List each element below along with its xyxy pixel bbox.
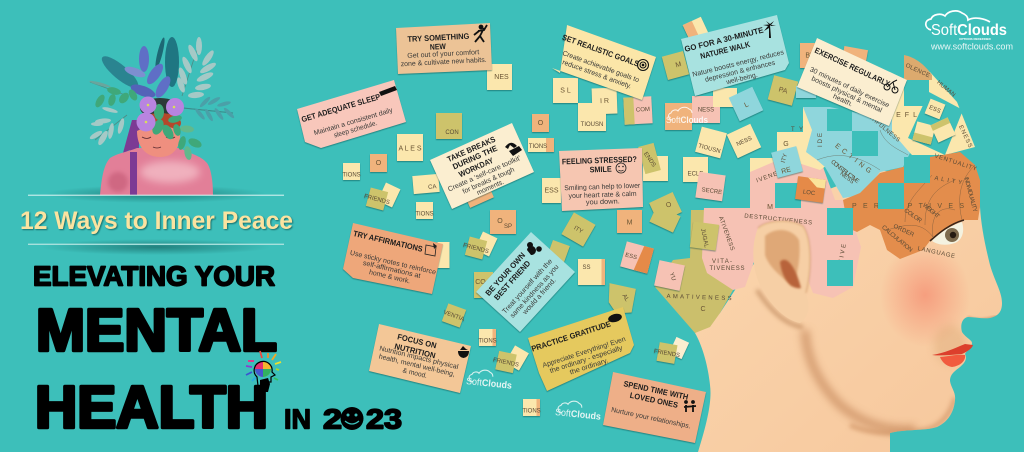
head: phrenology profile xyxy=(655,55,1002,452)
scattered puzzle pieces: ITY xyxy=(781,153,789,164)
orange perceptives region: ALITY xyxy=(934,176,962,186)
note: get adequate sleep: Maintain a consistent daily xyxy=(313,107,394,137)
note: spend time with loved ones xyxy=(603,372,706,443)
note: practice gratitude: the ordinary. xyxy=(569,357,609,376)
note: go for a 30-minute nature walk: depression & enhances xyxy=(704,60,776,84)
pink propensities region: DESTRUCTIVENESS xyxy=(744,213,812,227)
scattered puzzle pieces: PA xyxy=(778,86,788,96)
pink propensities region: VITA- xyxy=(712,259,732,265)
scattered puzzle pieces: CON xyxy=(445,130,459,136)
scattered puzzle pieces: YU xyxy=(668,272,676,282)
pink propensities region: ENTIVE xyxy=(836,244,848,276)
note: exercise regularly: boosts physical & mental xyxy=(810,75,883,115)
note: practice gratitude: Appreciate Everything! Even xyxy=(542,336,627,370)
icon: running figure xyxy=(474,25,487,42)
logo: SoftClouds: OPTIONS REDEFINED xyxy=(959,37,992,41)
note: be your own best friend: BEST FRIEND xyxy=(492,259,533,302)
note: focus on nutrition xyxy=(369,324,471,393)
scattered puzzle pieces: O xyxy=(497,218,503,225)
note: focus on nutrition: health, mental well-being, xyxy=(378,353,456,378)
note: take breaks during the workday: WORKDAY xyxy=(457,156,495,179)
logo watermark: lower: SoftClouds xyxy=(555,407,601,423)
icon: smiley xyxy=(616,163,626,173)
note: spend time with loved ones: Nurture your relationships. xyxy=(610,407,691,430)
note: feeling stressed smile: your heart rate & calm xyxy=(568,191,637,200)
teal cutout squares xyxy=(775,80,963,286)
note: take breaks during the workday: DURING THE xyxy=(451,143,499,172)
note: go for a 30-minute nature walk xyxy=(681,15,789,96)
note: try something new xyxy=(396,23,492,74)
scattered puzzle pieces: M xyxy=(675,61,682,69)
amativeness region: AMATIVENESS xyxy=(666,294,732,302)
scattered puzzle pieces: TIONS xyxy=(415,212,434,218)
note: try affirmations: self-affirmations at xyxy=(362,260,421,280)
scattered puzzle pieces: TIONS xyxy=(478,338,497,344)
note: try affirmations: home & work. xyxy=(368,269,411,285)
scattered puzzle pieces: TIONS xyxy=(522,408,541,414)
orange perceptives region xyxy=(843,152,980,259)
title line: in 2023: 23 xyxy=(366,404,402,434)
note: get adequate sleep xyxy=(297,80,406,148)
note: get adequate sleep: sleep schedule. xyxy=(333,120,378,140)
icon: two friends xyxy=(527,242,542,255)
face and neck skin xyxy=(695,170,1002,452)
note: try affirmations: TRY AFFIRMATIONS xyxy=(352,229,424,254)
logo watermark: centre: SoftClouds xyxy=(466,376,512,392)
logo watermark: head: SoftClouds xyxy=(666,115,708,125)
scattered puzzle pieces: CO xyxy=(475,279,486,286)
scattered puzzle pieces: ITY xyxy=(572,225,584,235)
scattered puzzle pieces: RE xyxy=(781,166,792,176)
yellow region: G xyxy=(783,141,789,148)
note: spend time with loved ones: LOVED ONES xyxy=(629,391,679,410)
scattered puzzle pieces: O xyxy=(538,120,544,127)
title line: elevating your: ELEVATING YOUR xyxy=(33,260,275,292)
scattered puzzle pieces: I R xyxy=(600,98,609,105)
icon: cyclist xyxy=(884,80,898,93)
scattered puzzle pieces: O xyxy=(665,201,673,210)
scattered puzzle pieces: S L xyxy=(560,88,571,94)
yellow region: TY xyxy=(791,127,803,133)
note: take breaks during the workday xyxy=(430,123,534,209)
note: focus on nutrition: Nutrition impacts physical xyxy=(379,345,459,371)
title line: in 2023: IN xyxy=(284,404,311,434)
note: go for a 30-minute nature walk: NATURE WALK xyxy=(699,40,751,61)
icon: target xyxy=(638,60,648,70)
note: try something new: Get out of your comfort xyxy=(407,49,479,60)
scattered puzzle pieces: ESS xyxy=(624,252,638,261)
note: be your own best friend: would a friend. xyxy=(521,277,558,317)
eye xyxy=(930,220,964,245)
note: feeling stressed smile: SMILE xyxy=(590,165,612,174)
orange perceptives region: INDIVIDUALITY xyxy=(962,177,978,213)
note: set realistic goals: SET REALISTIC GOALS xyxy=(561,33,641,69)
note: go for a 30-minute nature walk: well-being. xyxy=(725,72,758,87)
note: exercise regularly: EXERCISE REGULARLY xyxy=(813,46,892,89)
note: focus on nutrition: FOCUS ON xyxy=(396,332,438,350)
note: exercise regularly xyxy=(797,38,907,126)
note: try affirmations xyxy=(343,223,443,294)
scattered puzzle pieces xyxy=(342,17,868,416)
blue sentiments region: IDE xyxy=(818,133,824,147)
orange perceptives region: PERCEPTIVES xyxy=(852,203,964,210)
note: practice gratitude xyxy=(528,307,634,391)
title line: in 2023: 2 xyxy=(323,404,342,434)
note: feeling stressed smile: you down. xyxy=(586,198,620,207)
loose pieces on skull: ESS xyxy=(928,105,941,115)
note: set realistic goals: Create achievable goals to xyxy=(561,50,640,84)
scattered puzzle pieces: COM xyxy=(636,107,650,114)
scattered puzzle pieces: FRIENDS xyxy=(653,349,680,359)
orange perceptives region: VENTUALITY xyxy=(933,153,977,173)
scattered puzzle pieces: O xyxy=(376,160,382,167)
note: practice gratitude: the ordinary - especially xyxy=(549,345,624,375)
scattered puzzle pieces: LOC xyxy=(802,189,816,197)
scattered puzzle pieces: VENTIA xyxy=(442,310,465,323)
blue sentiments region xyxy=(803,107,910,198)
icon: praying hands xyxy=(607,312,623,324)
icon: bed xyxy=(379,86,397,96)
divider rule with shadow: upper xyxy=(28,195,284,196)
scattered puzzle pieces: ENDS xyxy=(642,151,656,168)
yellow region: ENESS xyxy=(957,124,973,149)
icon: coffee and car xyxy=(505,143,522,156)
face shading xyxy=(757,243,998,433)
note: spend time with loved ones: SPEND TIME WITH xyxy=(623,379,689,402)
divider rule with shadow: lower xyxy=(28,239,284,255)
blue sentiments region: MIRTHFULNESS xyxy=(859,107,901,144)
yellow region: HUMAN xyxy=(935,80,956,99)
pink propensities region: M xyxy=(767,204,773,211)
orange perceptives region: ORDER xyxy=(892,224,915,239)
scattered puzzle pieces: BE xyxy=(805,52,815,60)
note: take breaks during the workday: TAKE BREAKS xyxy=(446,134,497,164)
note: try something new: TRY SOMETHING xyxy=(407,32,470,44)
illustration: woman with leaves and flowers xyxy=(46,37,266,203)
hair xyxy=(123,120,140,195)
body xyxy=(100,148,213,195)
orange perceptives region: COLOR xyxy=(903,208,923,225)
blue sentiments region: ECTING xyxy=(833,143,872,175)
scattered puzzle pieces: A L E S xyxy=(398,146,422,152)
orange perceptives region: CALCULATION xyxy=(880,225,913,254)
note: set realistic goals: reduce stress & anxiety. xyxy=(561,59,632,90)
note: be your own best friend: BE YOUR OWN xyxy=(484,251,527,298)
scattered puzzle pieces: JUGAL xyxy=(699,228,709,249)
logo watermark: centre xyxy=(466,368,513,392)
note: exercise regularly: health. xyxy=(832,93,854,108)
note: exercise regularly: 30 minutes of daily exercise xyxy=(808,66,890,109)
logo watermark: lower xyxy=(555,399,602,423)
note: try affirmations: Use sticky notes to reinforce xyxy=(349,250,437,276)
scattered puzzle pieces: ESS xyxy=(544,188,559,194)
scattered puzzle pieces: FRIENDS xyxy=(462,243,489,255)
logo: SoftClouds: www.softclouds.com xyxy=(930,42,1013,52)
scattered puzzle pieces: SS xyxy=(582,265,591,271)
note: go for a 30-minute nature walk: GO FOR A 30-MINUTE xyxy=(684,25,765,54)
scattered puzzle pieces: L xyxy=(743,101,750,109)
title line: in 2023 xyxy=(284,404,402,434)
amativeness region xyxy=(655,210,733,333)
language label: LANGUAGE xyxy=(917,246,955,260)
title line: health: HEALTH xyxy=(35,374,268,440)
note: go for a 30-minute nature walk: Nature boosts energy, reduces xyxy=(692,49,785,79)
logo watermark: head xyxy=(666,107,708,125)
scattered puzzle pieces: ECLE xyxy=(688,172,703,178)
note: be your own best friend xyxy=(476,232,575,332)
peach veneration top xyxy=(904,55,932,80)
scattered puzzle pieces: NESS xyxy=(698,108,714,114)
note: feeling stressed smile: FEELING STRESSED? xyxy=(562,155,637,166)
note: try something new: zone & cultivate new habits. xyxy=(401,57,487,68)
note: be your own best friend: same kindness as you xyxy=(509,264,561,320)
amativeness region: C xyxy=(700,306,706,313)
yellow region xyxy=(750,72,975,172)
scattered puzzle pieces: AL xyxy=(621,293,630,303)
scattered puzzle pieces: FRIENDS xyxy=(492,357,519,369)
note: take breaks during the workday: for breaks & tough xyxy=(462,166,516,196)
logo: SoftClouds: SoftClouds xyxy=(931,22,1007,39)
peach veneration top: OLENCE xyxy=(904,63,930,79)
note: set realistic goals xyxy=(552,25,656,100)
scattered puzzle pieces: TIOUSN xyxy=(581,122,603,128)
icon: rainbow head xyxy=(246,351,281,392)
pink propensities region: ATIVENESS xyxy=(717,216,735,252)
orange perceptives region: WEIGHT xyxy=(921,203,940,220)
blue sentiments region: CONSTRUCTIVE xyxy=(829,159,860,185)
yellow region: REFL xyxy=(887,112,917,119)
face xyxy=(137,126,180,157)
subtitle: 12 Ways to Inner Peace: 12 Ways to Inner Peace xyxy=(20,207,293,235)
loose pieces on skull xyxy=(912,99,956,145)
lips xyxy=(932,344,973,367)
icon: palm tree xyxy=(763,21,776,38)
icon: sticky note xyxy=(425,243,437,256)
blue sentiments region: NESS xyxy=(838,171,855,186)
note: feeling stressed smile xyxy=(559,148,643,211)
note: focus on nutrition: NUTRITION xyxy=(393,342,437,360)
scattered puzzle pieces: NES xyxy=(494,74,509,81)
note: practice gratitude: PRACTICE GRATITUDE xyxy=(530,319,613,354)
note: try something new: NEW xyxy=(430,42,446,52)
pink propensities region xyxy=(702,157,861,298)
scattered puzzle pieces: TIOUSN xyxy=(697,143,721,155)
scattered puzzle pieces: NESS xyxy=(736,136,753,148)
pink propensities region: IVENESS xyxy=(756,168,788,184)
pink propensities region: TIVENESS xyxy=(710,266,744,272)
ear xyxy=(753,221,810,323)
scattered puzzle pieces: SECRE xyxy=(701,187,722,196)
scattered puzzle pieces: CA xyxy=(428,184,437,191)
icon: bowl xyxy=(458,346,469,358)
main title xyxy=(33,260,402,440)
note: get adequate sleep: GET ADEQUATE SLEEP xyxy=(300,92,382,124)
scattered puzzle pieces: TIONS xyxy=(342,172,361,178)
note: focus on nutrition: & mood. xyxy=(402,367,428,380)
scattered puzzle pieces: SP xyxy=(504,224,512,230)
logo: SoftClouds xyxy=(926,11,1013,53)
scattered puzzle pieces: M xyxy=(627,220,633,226)
note: feeling stressed smile: Smiling can help to lower xyxy=(564,183,641,192)
note: take breaks during the workday: moments. xyxy=(476,179,505,197)
note: be your own best friend: Treat yourself with the xyxy=(501,258,554,315)
scattered puzzle pieces: FRIENDS xyxy=(363,194,390,206)
scattered puzzle pieces: TIONS xyxy=(529,144,547,150)
icon: two people xyxy=(684,401,696,412)
title line: mental: MENTAL xyxy=(36,298,277,364)
note: take breaks during the workday: Create a 'self-care toolkit' xyxy=(447,155,522,193)
